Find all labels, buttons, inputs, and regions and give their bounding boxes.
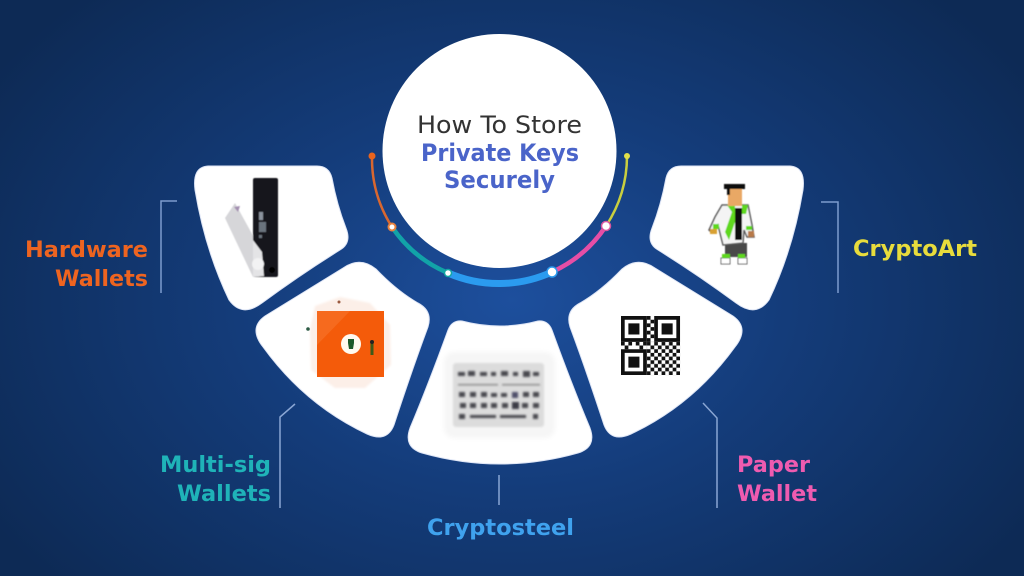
- label: hardware wallets: Wallets: [55, 267, 148, 292]
- label: multi-sig wallets: Wallets: [177, 482, 271, 507]
- title: private keys: Private Keys: [421, 139, 579, 167]
- panel: cryptoart card: [650, 166, 803, 310]
- icon: pixel art character: [709, 184, 754, 264]
- label: hardware wallets: [25, 238, 148, 292]
- panel: paper wallet card: [569, 262, 742, 437]
- panel: multi-sig wallets card: [256, 262, 429, 437]
- title: securely: Securely: [444, 166, 555, 194]
- label: paper wallet: Wallet: [737, 482, 817, 507]
- connector: multi-sig wallets: [280, 404, 295, 508]
- icon: orange vault: [306, 297, 391, 388]
- label: multi-sig wallets: Multi-sig: [160, 453, 271, 478]
- connector: cryptosteel: [498, 475, 500, 505]
- panel: cryptosteel card: [408, 321, 592, 464]
- label: cryptosteel: Cryptosteel: [427, 516, 574, 541]
- panel: hardware wallets card: [195, 166, 348, 310]
- title: how to store: How To Store: [417, 111, 582, 139]
- central title circle: [382, 34, 616, 268]
- connector: paper wallet: [703, 403, 717, 508]
- connector: cryptoart: [821, 202, 838, 293]
- icon: cryptosteel plate: [444, 352, 555, 438]
- icon: QR code: [621, 316, 680, 375]
- connector: hardware wallets: [161, 201, 177, 293]
- coloured arc timeline: [368, 152, 630, 284]
- label: hardware wallets: Hardware: [25, 238, 148, 263]
- icon: hardware wallet device: [225, 178, 278, 277]
- label: paper wallet: [737, 453, 817, 507]
- label: cryptoart: CryptoArt: [853, 237, 977, 262]
- label: paper wallet: Paper: [737, 453, 810, 478]
- label: multi-sig wallets: [160, 453, 271, 507]
